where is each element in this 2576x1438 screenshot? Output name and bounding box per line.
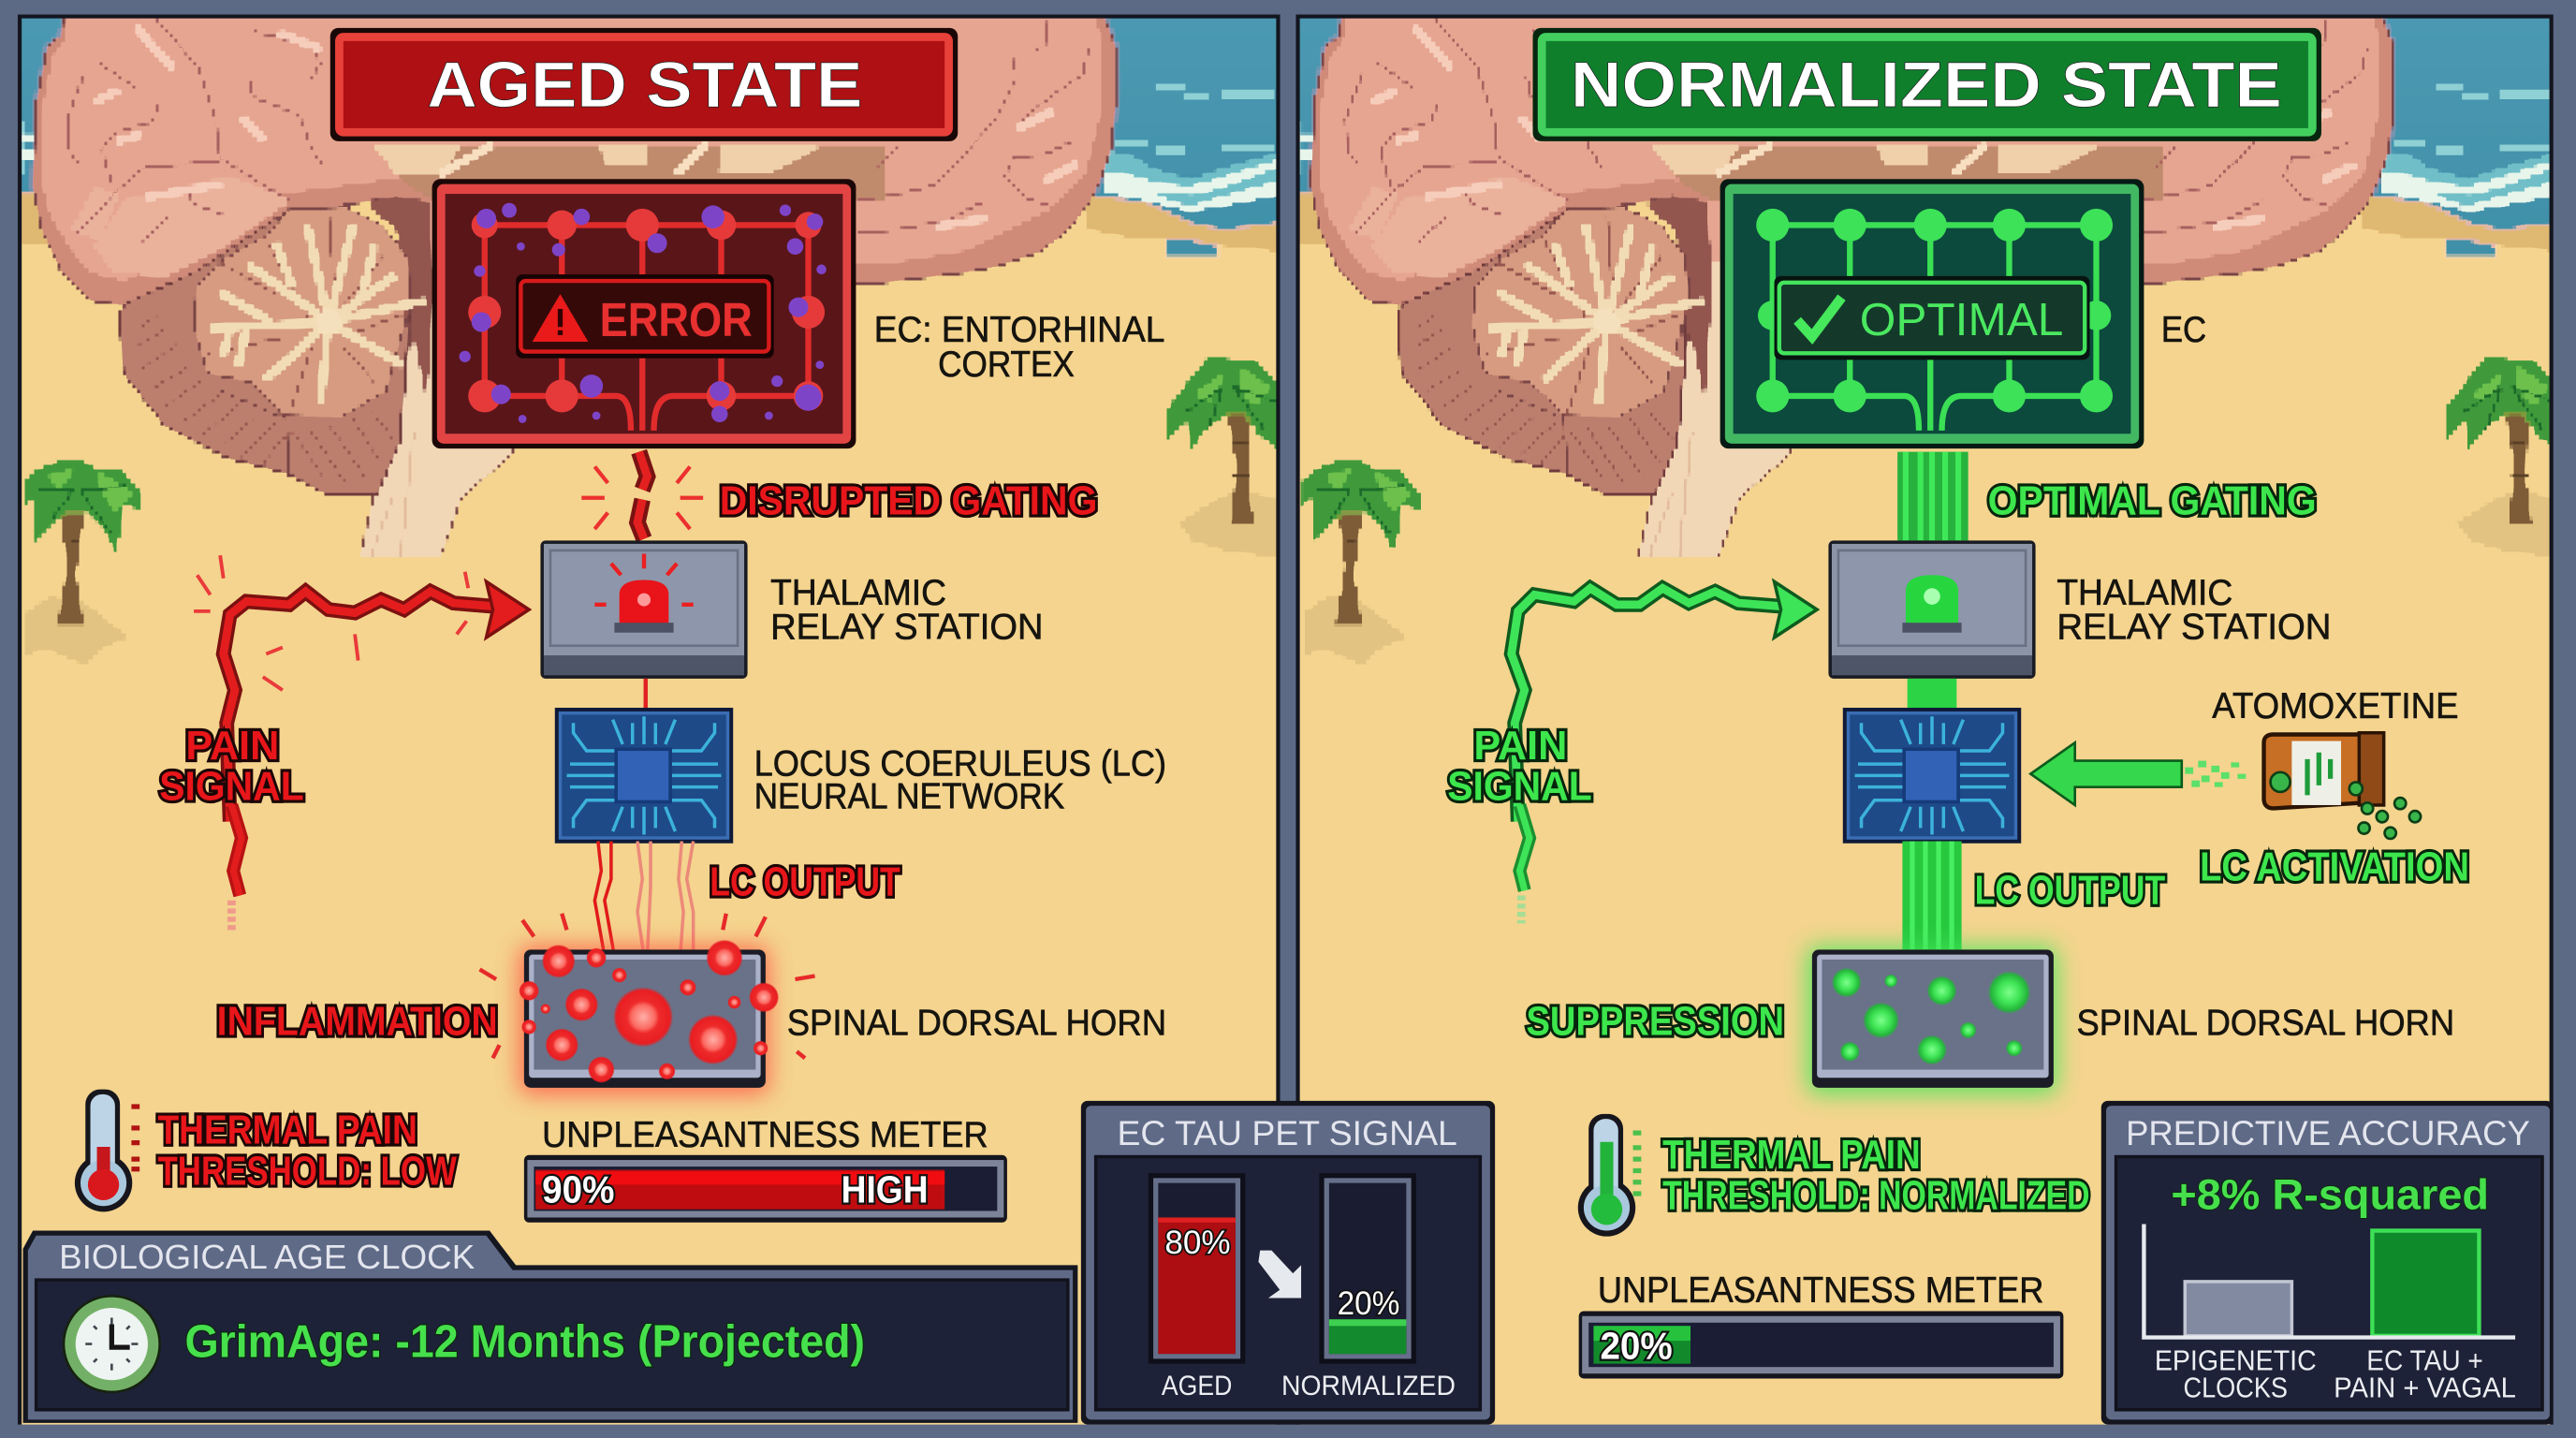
label: EC entorhinal cortex: EC: ENTORHINAL bbox=[874, 309, 1164, 350]
panel: EC tau PET signal bbox=[1081, 1101, 1495, 1425]
chip: locus coeruleus normalized bbox=[1845, 710, 2019, 842]
bar: normalized 20%: 20% bbox=[1338, 1285, 1399, 1322]
label: EC: EC bbox=[2161, 309, 2206, 350]
label: pain signal aged: SIGNAL bbox=[159, 764, 304, 810]
panel: predictive accuracy: EC TAU + bbox=[2366, 1344, 2483, 1377]
thalamic relay aged bbox=[540, 540, 748, 679]
panel: biological age clock: GrimAge: -12 Months (Projected) bbox=[184, 1317, 865, 1368]
bar chart bbox=[2144, 1224, 2515, 1338]
panel: biological age clock bbox=[23, 1231, 1077, 1423]
meter: unpleasantness 90% bbox=[524, 1155, 1007, 1223]
icon: clock bbox=[63, 1295, 161, 1393]
panel: EC tau PET signal: NORMALIZED bbox=[1281, 1371, 1456, 1401]
labels: thalamic relay station normalized: THALAMIC bbox=[2056, 572, 2232, 613]
label: pain signal aged: PAIN bbox=[185, 723, 279, 769]
bar: aged 80%: 80% bbox=[1164, 1225, 1231, 1261]
label: thermal pain threshold low: THERMAL PAIN bbox=[157, 1107, 417, 1152]
title: aged state bbox=[330, 28, 958, 141]
title: normalized state: NORMALIZED STATE bbox=[1571, 49, 2282, 121]
label: pain signal normalized: PAIN bbox=[1473, 723, 1567, 769]
label: pain signal normalized bbox=[1447, 723, 1592, 810]
label: thermal pain threshold normalized: THRESHOLD: NORMALIZED bbox=[1662, 1173, 2089, 1219]
panel: biological age clock: BIOLOGICAL AGE CLOCK bbox=[59, 1239, 475, 1276]
label: thermal pain threshold low bbox=[157, 1107, 457, 1194]
label: optimal gating: OPTIMAL GATING bbox=[1988, 477, 2317, 523]
labels: thalamic relay station normalized bbox=[2056, 572, 2331, 648]
panel: predictive accuracy: EPIGENETIC bbox=[2155, 1344, 2317, 1377]
spinal dorsal horn normalized bbox=[1808, 946, 2056, 1094]
labels: thalamic relay station: RELAY STATION bbox=[770, 607, 1043, 648]
label: unpleasantness aged: UNPLEASANTNESS METER bbox=[542, 1114, 988, 1155]
label: pain signal normalized: SIGNAL bbox=[1447, 764, 1592, 810]
beam: LC output normalized bbox=[1902, 842, 1962, 949]
arrow: pain signal normalized bbox=[1512, 581, 1817, 923]
label: unpleasantness normalized: UNPLEASANTNESS METER bbox=[1598, 1269, 2043, 1311]
label: thermal pain threshold low: THRESHOLD: LOW bbox=[157, 1148, 457, 1194]
disrupted gating signal bbox=[581, 452, 703, 539]
label: EC entorhinal cortex bbox=[874, 309, 1164, 385]
lines: LC output aged bbox=[594, 842, 694, 956]
bar: aged 80% bbox=[1149, 1173, 1245, 1364]
panel: EC tau PET signal: EC TAU PET SIGNAL bbox=[1117, 1114, 1457, 1152]
icon: check mark bbox=[1797, 298, 1841, 337]
label: locus coeruleus aged: LOCUS COERULEUS (LC) bbox=[754, 742, 1166, 784]
label: locus coeruleus aged bbox=[754, 742, 1166, 816]
panel: predictive accuracy: CLOCKS bbox=[2184, 1372, 2288, 1404]
label: spinal dorsal horn normalized: SPINAL DORSAL HORN bbox=[2076, 1003, 2454, 1044]
icon: warning triangle bbox=[533, 294, 588, 342]
label: EC entorhinal cortex: CORTEX bbox=[938, 344, 1075, 385]
meter: unpleasantness 20%: 20% bbox=[1600, 1324, 1673, 1367]
labels: thalamic relay station bbox=[770, 572, 1043, 648]
beam: optimal gating bbox=[1897, 452, 1969, 540]
label: disrupted gating: DISRUPTED GATING bbox=[720, 477, 1097, 523]
label: LC output aged: LC OUTPUT bbox=[710, 858, 900, 904]
meter: unpleasantness 90%: 90% bbox=[542, 1168, 614, 1211]
panel: predictive accuracy: +8% R-squared bbox=[2171, 1171, 2489, 1219]
icon: green siren bbox=[1902, 575, 1962, 633]
label: pain signal aged bbox=[159, 723, 304, 810]
label: atomoxetine: ATOMOXETINE bbox=[2212, 685, 2459, 726]
panel: entorhinal cortex optimal bbox=[1720, 179, 2144, 448]
bar: normalized 20% bbox=[1319, 1173, 1416, 1364]
panel: predictive accuracy bbox=[2101, 1101, 2553, 1425]
labels: thalamic relay station normalized: RELAY STATION bbox=[2056, 607, 2331, 648]
label: locus coeruleus aged: NEURAL NETWORK bbox=[754, 775, 1064, 816]
arrow: pain signal aged bbox=[194, 555, 529, 933]
chip: locus coeruleus aged bbox=[557, 710, 731, 842]
meter: unpleasantness 20% bbox=[1579, 1312, 2063, 1378]
icon: red siren bbox=[594, 553, 694, 633]
meter: unpleasantness 90%: HIGH bbox=[842, 1168, 929, 1211]
spinal dorsal horn inflamed bbox=[479, 914, 815, 1094]
icon: thermometer normalized bbox=[1578, 1114, 1641, 1237]
label: thermal pain threshold normalized: THERMAL PAIN bbox=[1662, 1132, 1921, 1178]
icon: thermometer low bbox=[75, 1090, 139, 1211]
label: spinal dorsal horn aged: SPINAL DORSAL HORN bbox=[787, 1003, 1166, 1044]
label: thermal pain threshold normalized bbox=[1662, 1132, 2089, 1219]
arrow: decrease bbox=[1258, 1251, 1301, 1298]
panel: EC tau PET signal: AGED bbox=[1162, 1371, 1232, 1401]
label: suppression: SUPPRESSION bbox=[1526, 999, 1784, 1045]
label: LC activation: LC ACTIVATION bbox=[2200, 844, 2469, 890]
labels: thalamic relay station: THALAMIC bbox=[770, 572, 946, 613]
label: inflammation: INFLAMMATION bbox=[217, 999, 498, 1045]
left panel scene: brain on beach bbox=[0, 17, 1298, 1430]
panel: entorhinal cortex error: ERROR bbox=[600, 293, 753, 346]
panel: entorhinal cortex optimal: OPTIMAL bbox=[1860, 295, 2063, 345]
title: aged state: AGED STATE bbox=[427, 49, 862, 121]
panel: entorhinal cortex error bbox=[432, 179, 856, 448]
panel: predictive accuracy: PREDICTIVE ACCURACY bbox=[2126, 1114, 2530, 1152]
right panel scene: brain on beach bbox=[1278, 17, 2576, 1430]
label: LC output normalized: LC OUTPUT bbox=[1975, 867, 2165, 913]
icon: pill bottle bbox=[2264, 733, 2421, 839]
arrow: atomoxetine to LC bbox=[2030, 742, 2246, 805]
thalamic relay normalized bbox=[1828, 540, 2036, 679]
panel: predictive accuracy: PAIN + VAGAL bbox=[2334, 1372, 2516, 1404]
title: normalized state bbox=[1533, 28, 2321, 141]
